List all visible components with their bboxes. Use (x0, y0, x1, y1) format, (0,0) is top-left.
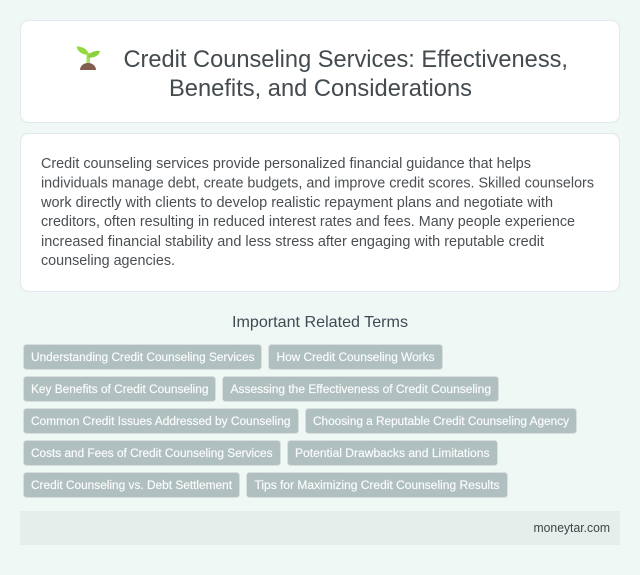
intro paragraph: individuals manage debt, create budgets, and improve credit scores. Skilled counselors (41, 176, 594, 192)
tag (222, 376, 498, 402)
tag (306, 408, 576, 434)
tag: Tips for Maximizing Credit Counseling Results (254, 478, 500, 492)
tag (24, 440, 280, 466)
tag (288, 440, 498, 466)
panel: intro card (20, 134, 620, 292)
tag: Key Benefits of Credit Counseling (31, 382, 209, 396)
tag: Costs and Fees of Credit Counseling Services (31, 446, 272, 460)
icon: seedling (76, 46, 100, 70)
title (124, 46, 568, 102)
tag (268, 344, 442, 370)
tag (24, 376, 216, 402)
footer (20, 511, 620, 545)
title: Benefits, and Considerations (169, 75, 472, 102)
intro paragraph: creditors, often resulting in reduced interest rates and fees. Many people experience (41, 214, 575, 230)
intro paragraph: counseling agencies. (41, 253, 175, 269)
tag (246, 472, 508, 498)
tag: How Credit Counseling Works (276, 350, 434, 364)
tag (24, 344, 262, 370)
tag: Credit Counseling vs. Debt Settlement (31, 478, 233, 492)
tag: Choosing a Reputable Credit Counseling Agency (313, 414, 570, 428)
intro paragraph (40, 156, 594, 269)
title: Credit Counseling Services: Effectiveness, (124, 46, 568, 73)
intro paragraph: Credit counseling services provide personalized financial guidance that helps (41, 156, 531, 172)
tag list (24, 344, 576, 498)
intro paragraph: work directly with clients to develop realistic repayment plans and negotiate with (40, 195, 553, 211)
tag: Potential Drawbacks and Limitations (295, 446, 490, 460)
tag (24, 472, 240, 498)
footer: moneytar.com (534, 520, 610, 535)
tag: Understanding Credit Counseling Services (31, 350, 254, 364)
heading: related terms: Important Related Terms (232, 314, 408, 331)
tag (24, 408, 298, 434)
tag: Common Credit Issues Addressed by Counseling (31, 414, 291, 428)
panel: header card (20, 20, 620, 122)
tag: Assessing the Effectiveness of Credit Counseling (230, 382, 491, 396)
intro paragraph: increased financial stability and less stress after engaging with reputable credit (41, 234, 544, 250)
